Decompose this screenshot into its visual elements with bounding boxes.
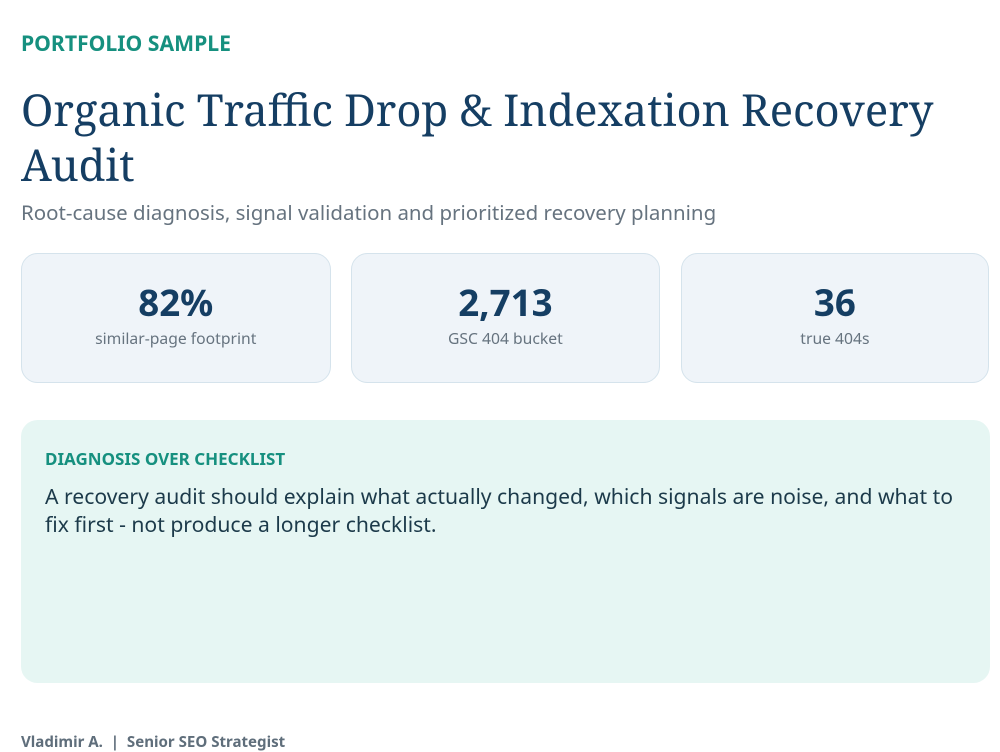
stat value: 36 [814, 277, 856, 327]
subtitle: Root-cause diagnosis, signal validation and prioritized recovery planning [21, 198, 716, 226]
panel: diagnosis over checklist [21, 420, 990, 683]
stat label: GSC 404 bucket [448, 327, 563, 349]
stat card: true 404s [680, 253, 989, 383]
stat card: similar-page footprint [21, 253, 330, 383]
panel body text: A recovery audit should explain what actually changed, which signals are noise, and what to fix first - not produce a longer checklist. [45, 482, 953, 539]
footer credit: Vladimir A. | Senior SEO Strategist [21, 732, 285, 752]
title: Organic Traffic Drop & Indexation Recovery Audit [21, 79, 933, 194]
eyebrow label: PORTFOLIO SAMPLE [21, 28, 231, 58]
stat label: true 404s [800, 327, 870, 349]
stat value: 2,713 [458, 277, 553, 327]
panel heading: DIAGNOSIS OVER CHECKLIST [45, 447, 285, 470]
stat card: GSC 404 bucket [351, 253, 660, 383]
stat value: 82% [138, 277, 213, 327]
stat label: similar-page footprint [95, 327, 256, 349]
